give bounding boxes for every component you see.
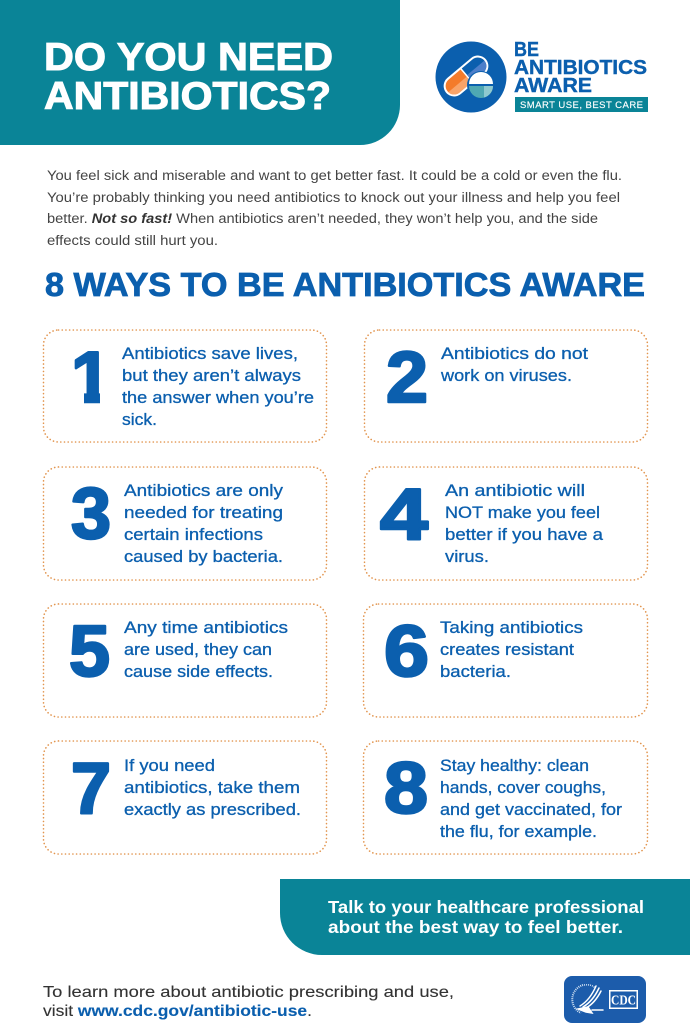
text: way 6: Taking antibiotics [440,619,583,637]
text: way 8: hands, cover coughs, [440,779,606,797]
text: way 3: needed for treating [124,504,283,522]
text: way 2 [440,345,588,385]
number 4: 4 [380,475,428,555]
logo tagline [515,97,648,112]
text: way 1 [122,345,314,429]
icon: HHS and CDC logo [564,976,646,1023]
footer text [43,984,454,1020]
text: way 8 [440,757,623,841]
text: way 4: better if you have a [445,526,604,544]
footer text: To learn more about antibiotic prescribing and use, [43,984,454,1001]
callout text [328,897,644,937]
text: way 1: but they aren’t always [122,367,301,385]
text: way 4 [445,482,604,566]
text: way 3: certain infections [124,526,263,544]
panel: way 3 [44,467,326,580]
text: way 1: Antibiotics save lives, [122,345,298,363]
icon: HHS and CDC logo: CDC [611,994,636,1008]
logo wordmark: BE [514,39,539,61]
text: way 4: virus. [445,548,489,566]
number 2: 2 [386,338,428,418]
text: way 6: creates resistant [440,641,574,659]
text: way 8: the flu, for example. [440,823,597,841]
panel: way 1 [44,330,326,442]
text: way 7: If you need [124,757,215,775]
header panel [0,0,400,145]
callout text: about the best way to feel better. [328,917,623,937]
panel: way 8 [364,741,648,854]
intro text: You’re probably thinking you need antibiotics to knock out your illness and help you feel [47,190,620,205]
text: way 5 [124,619,288,681]
text: way 7 [124,757,301,819]
text: way 2: work on viruses. [440,367,572,385]
panel: way 7 [44,741,326,854]
panel: way 2 [364,330,648,442]
logo tagline: SMART USE, BEST CARE [520,100,643,111]
text: way 5: Any time antibiotics [124,619,288,637]
number 5: 5 [69,612,110,692]
text: way 8: and get vaccinated, for [440,801,623,819]
intro text: better. Not so fast! When antibiotics aren’t needed, they won’t help you, and the side [47,211,598,226]
text: way 6 [440,619,583,681]
callout banner [280,879,690,955]
number 6: 6 [384,612,429,692]
panel: way 4 [364,467,648,580]
title: ANTIBIOTICS? [44,75,331,118]
logo wordmark: ANTIBIOTICS [514,57,647,79]
heading: 8 WAYS TO BE ANTIBIOTICS AWARE [45,266,645,303]
panel: way 5 [44,604,326,717]
number 7: 7 [71,749,111,829]
number 1: 1 [71,338,111,418]
logo: Be Antibiotics Aware [436,39,648,112]
number 8: 8 [384,749,428,829]
icon: pill and tablet [436,42,506,112]
footer text: visit www.cdc.gov/antibiotic-use . [43,1003,312,1020]
text: way 7: antibiotics, take them [124,779,300,797]
logo wordmark: AWARE [514,75,592,97]
text: way 1: the answer when you’re [122,389,314,407]
title: DO YOU NEED [44,36,333,79]
text: way 1: sick. [122,411,157,429]
text: way 3: Antibiotics are only [124,482,284,500]
text: way 3 [124,482,284,566]
text: way 8: Stay healthy: clean [440,757,589,775]
text: way 3: caused by bacteria. [124,548,283,566]
text: way 5: cause side effects. [124,663,273,681]
text: way 6: bacteria. [440,663,511,681]
callout text: Talk to your healthcare professional [328,897,644,917]
title [44,36,333,118]
text: way 4: NOT make you feel [445,504,600,522]
intro text: effects could still hurt you. [47,233,218,248]
text: way 4: An antibiotic will [445,482,585,500]
intro text: You feel sick and miserable and want to get better fast. It could be a cold or even the flu. [47,168,622,183]
text: way 5: are used, they can [124,641,272,659]
text: way 2: Antibiotics do not [441,345,588,363]
panel: way 6 [364,604,648,717]
intro text [47,168,622,248]
logo wordmark [514,39,647,97]
text: way 7: exactly as prescribed. [124,801,301,819]
number 3: 3 [71,474,111,554]
